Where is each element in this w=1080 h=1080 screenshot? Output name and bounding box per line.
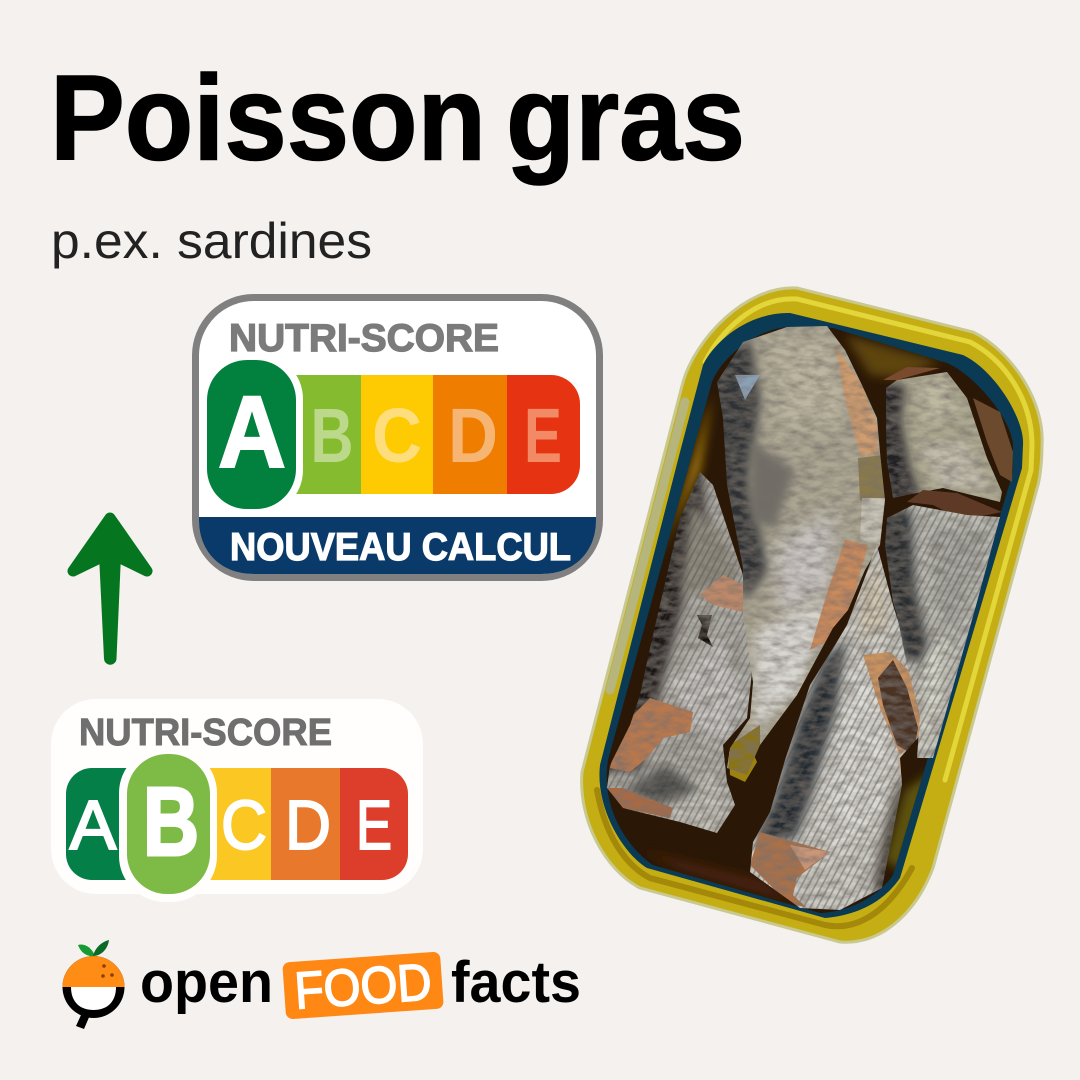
title: gras [506,50,745,186]
old score colour bar: A [70,786,117,864]
fish: right upper [886,372,1002,502]
old score colour bar: D [285,786,331,864]
new score colour bar: E [524,393,562,479]
wordmark: facts: facts [451,950,581,1015]
new score heading: NUTRI-SCORE [229,317,499,360]
highlighted grade B pill: B [143,767,199,876]
title: Poisson [50,50,486,186]
tin blue lining [599,313,1023,918]
highlighted grade B pill [119,747,217,902]
fish: brown strip [907,490,1002,520]
new score colour bar: D [448,393,498,479]
nouveau calcul text: NOUVEAU CALCUL [230,526,571,569]
fish: top strip [883,367,940,380]
fish: bottom centre [750,546,920,910]
old nutri-score label: B [51,699,423,902]
old score colour bar: C [221,786,267,864]
fish: right lower [885,505,1000,758]
fish: centre top [717,326,885,775]
fish: left [607,472,752,833]
tin rim [582,288,1042,942]
subtitle: p.ex. sardines [51,213,372,269]
tag: food: FOOD [293,953,433,1021]
new score colour bar: C [372,393,422,479]
new score colour bar [285,375,580,494]
old score colour bar: E [356,786,392,864]
highlighted grade A pill: A [218,375,286,489]
new score colour bar: B [310,393,354,479]
old score heading: NUTRI-SCORE [79,712,332,754]
old score colour bar [66,768,408,880]
oil [590,320,1030,920]
sardine fillets [590,320,1013,915]
icon: orange with magnifier [62,940,124,1029]
arrow up [73,518,147,665]
highlighted grade A pill [200,353,303,516]
title [50,50,745,186]
wordmark: open: open [140,950,273,1015]
new nutri-score label: A, nouveau calcul [196,298,600,578]
sardine tin illustration [582,288,1042,942]
open food facts logo [62,940,581,1029]
new score blue band [199,517,596,574]
fish: right chunk [973,398,1013,482]
